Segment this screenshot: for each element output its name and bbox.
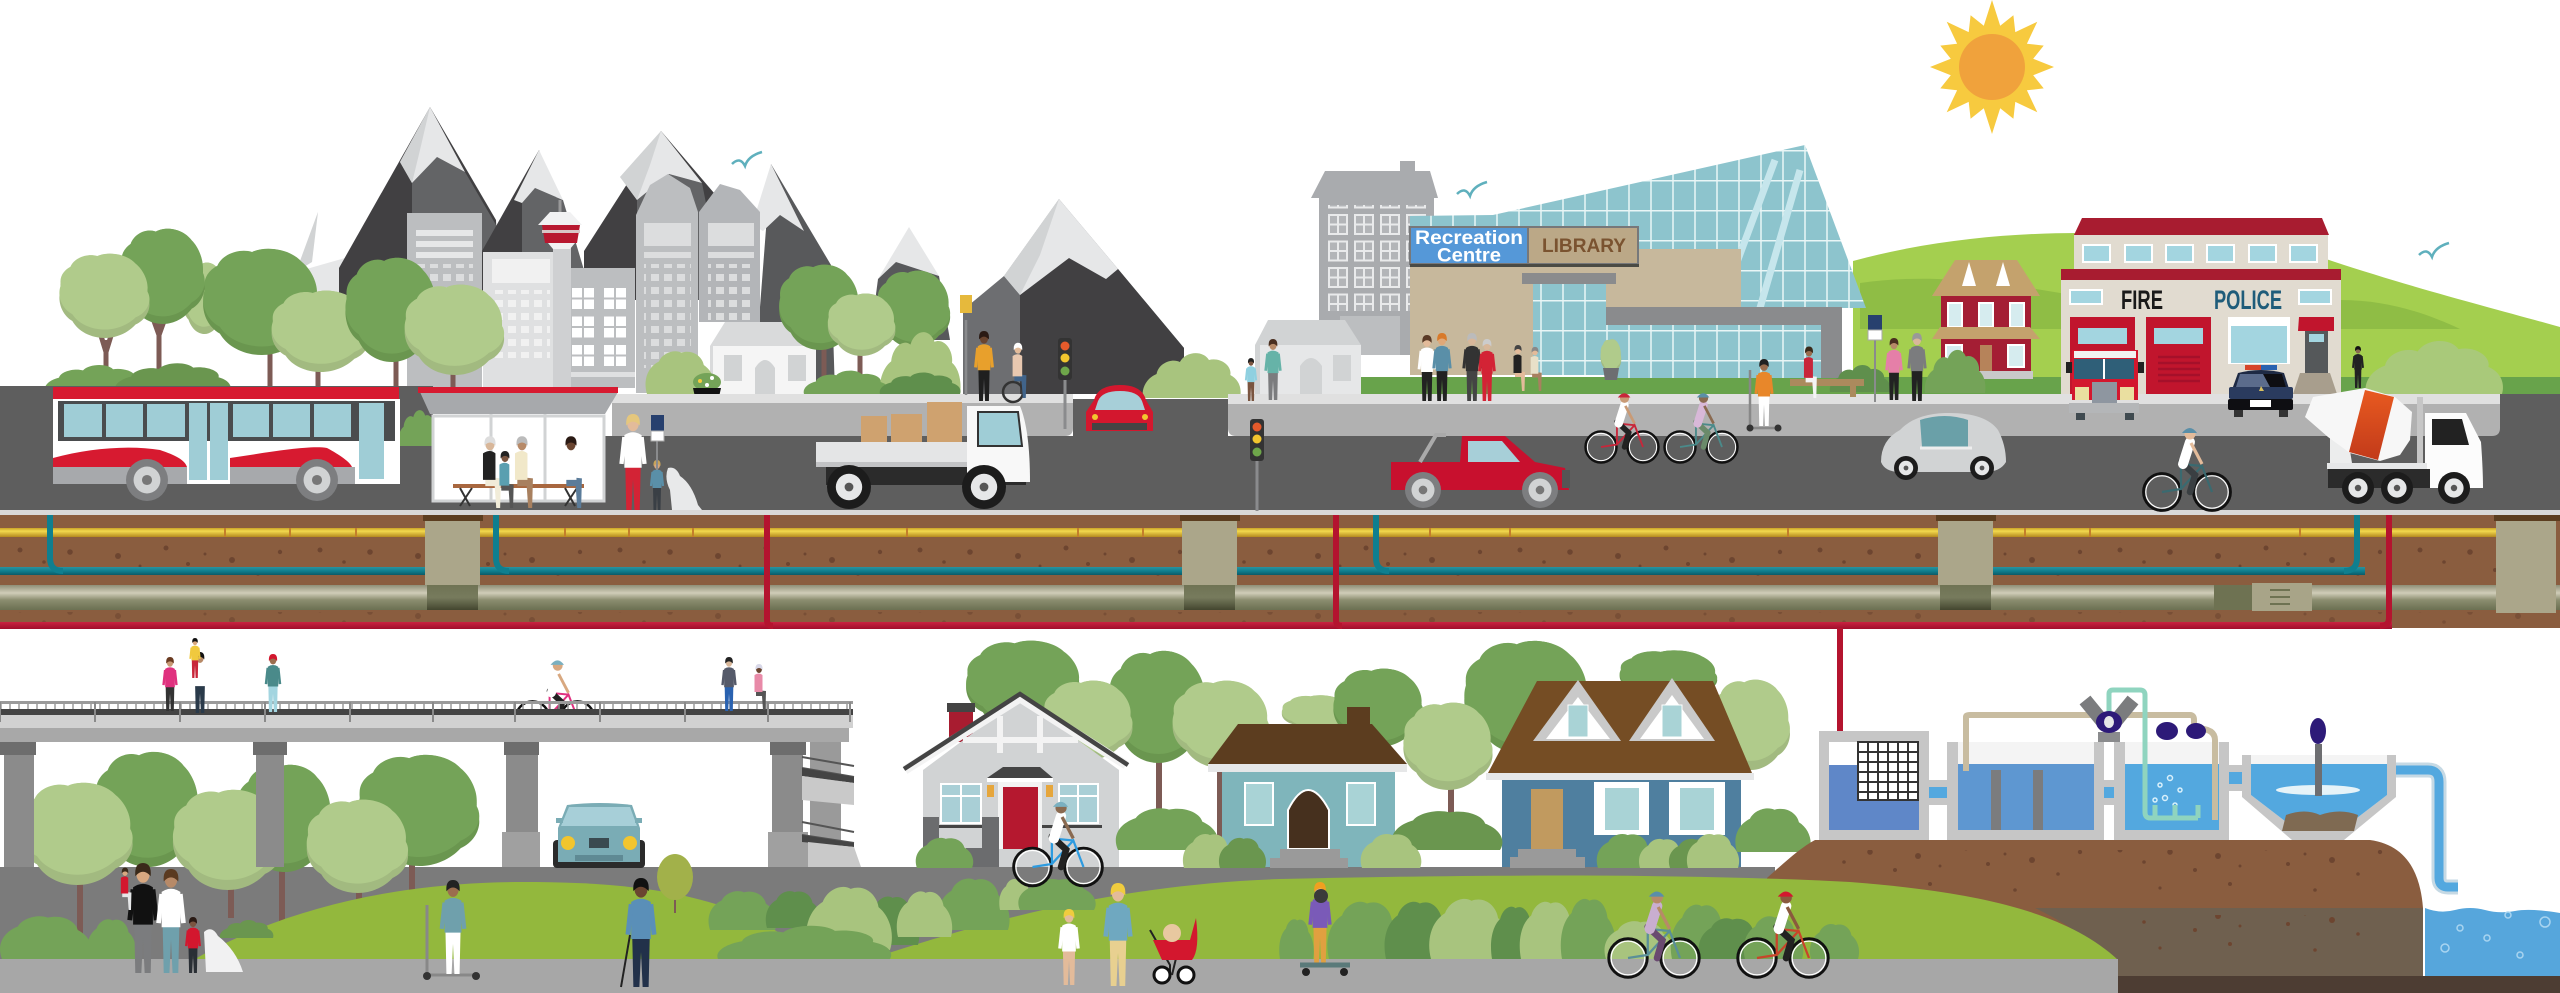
dog [204,929,243,972]
earth bank [1767,840,2560,993]
people and dog at stop [621,414,702,510]
primary tank [1947,742,2104,840]
sign: Recreation Centre: Recreation [1415,227,1523,249]
police car [2228,365,2293,417]
lower road behind hills [0,867,1775,962]
steps [1510,849,1585,868]
red car front view [1086,385,1153,431]
man on kick scooter [423,880,480,980]
aeration tank [2114,742,2229,840]
water body [2425,908,2560,976]
people on bridge [164,638,766,713]
grey canopy [1522,273,1842,378]
glass streaks [1720,160,1800,308]
sign: Recreation Centre: Centre [1437,244,1501,266]
deck [0,701,853,742]
bushes upper level [45,332,1985,398]
icon: bus stop sign [651,415,664,470]
bridge pillars [0,742,808,867]
cyclists on the road [1585,393,1738,463]
bus shelter [418,387,618,508]
bench with seated person [1790,346,1864,398]
two people by bus stop [1887,333,1925,401]
steps [1270,849,1348,868]
sidewalk middle left [612,394,1073,436]
sidewalk lower [0,959,2118,993]
sign: Library [1528,227,1638,264]
traffic light two [1250,419,1264,511]
people seated in shelter [483,436,582,508]
recreation centre and library [1410,145,1866,378]
red house [1932,260,2040,379]
label: FIRE: FIRE [2121,285,2163,315]
utility vaults [423,515,2560,613]
gas pipe: yellow [0,528,2500,537]
trees behind houses [966,641,1790,860]
outfall pipe [2396,770,2458,887]
white church building left [710,322,816,394]
flower planter [693,373,721,397]
mountains [296,107,1184,394]
sewer main [0,583,2560,611]
sign: Recreation Centre [1410,227,1528,266]
underground utilities cross section [0,515,2560,629]
pickup truck [1391,435,1570,508]
concrete mixer truck [2305,388,2483,504]
sanitary pipes: red [0,515,2392,629]
lamp post [960,295,972,395]
door [998,782,1042,849]
blue house [1486,678,1754,868]
cyclist near grey house [1014,802,1102,886]
cyclists on lower path [1609,891,1828,977]
grey apartment tower behind recreation centre [1311,161,1438,355]
door [1288,790,1329,849]
windows with shutters [1594,782,1725,835]
small tree and planter at library [1601,339,1621,380]
chimney [947,703,975,742]
girl woman and stroller [1060,883,1197,986]
grey house [904,694,1128,867]
police front [2228,317,2337,394]
station roof [2074,218,2329,235]
fire truck [2066,350,2144,420]
dog [666,468,702,510]
process piping [1966,690,2215,820]
person pushing wheelchair [976,331,1026,402]
white church building right [1255,320,1361,394]
cyclist in road right [2144,428,2230,510]
door [1531,789,1563,849]
stone panels [923,817,999,867]
city skyline buildings and tower [407,174,760,393]
fire garage doors [2070,317,2211,394]
road and sidewalks [0,386,2560,515]
green hills behind the civic buildings [1361,233,2560,395]
foreground shrubs [0,879,1859,959]
right side bushes and police officer [2353,341,2503,394]
elevated pedestrian bridge [0,638,861,867]
blowers [2085,700,2206,742]
soil [0,515,2560,628]
red pipe feeding treatment plant [1837,628,1843,797]
cyclist on bridge behind deck [516,660,594,735]
glass atrium [1410,145,1866,308]
autonomous grey car [1881,413,2006,480]
wastewater treatment plant [1819,690,2458,887]
side windows [2070,290,2331,304]
lower glazing [1533,284,1821,378]
bush behind bus shelter [398,410,438,446]
ramp [802,742,861,867]
birds [732,152,2449,257]
clarifier [2242,718,2396,840]
lamps [987,785,1053,797]
upper windows [2083,245,2317,262]
connector pipes [1929,765,2242,805]
teal house [1208,707,1407,868]
bus stop sign right [1868,315,1882,402]
blue car under bridge [553,803,645,868]
icon: sun [1930,0,2054,134]
beige building walls [1410,249,1741,375]
flatbed truck with boxes [816,402,1030,509]
bus: 10 [327,428,337,438]
windows [941,784,1098,823]
water pipe: teal [0,515,2365,575]
sign: Library: LIBRARY [1542,235,1626,257]
fire and police station [2061,218,2341,394]
trees upper left cluster [59,229,950,405]
traffic light one [1058,338,1072,429]
group of people at recreation centre [1419,333,1542,401]
sidewalk right [1228,394,2500,436]
chimney [1347,707,1370,727]
small olive tree [657,854,693,913]
label: POLICE: POLICE [2214,285,2282,315]
headworks screen tank [1819,731,1929,840]
pedestrians at left sidewalk [1246,339,1280,401]
green hills foreground [195,876,2118,960]
bus [53,387,400,501]
stroller [1150,918,1197,983]
house garden bushes [916,808,1811,868]
skateboarder [1300,882,1350,976]
trees behind bridge [21,752,479,940]
man with walking cane [621,878,654,987]
person on electric scooter [1746,359,1782,432]
family with child and dog [121,863,243,973]
dormer windows [1533,678,1715,741]
